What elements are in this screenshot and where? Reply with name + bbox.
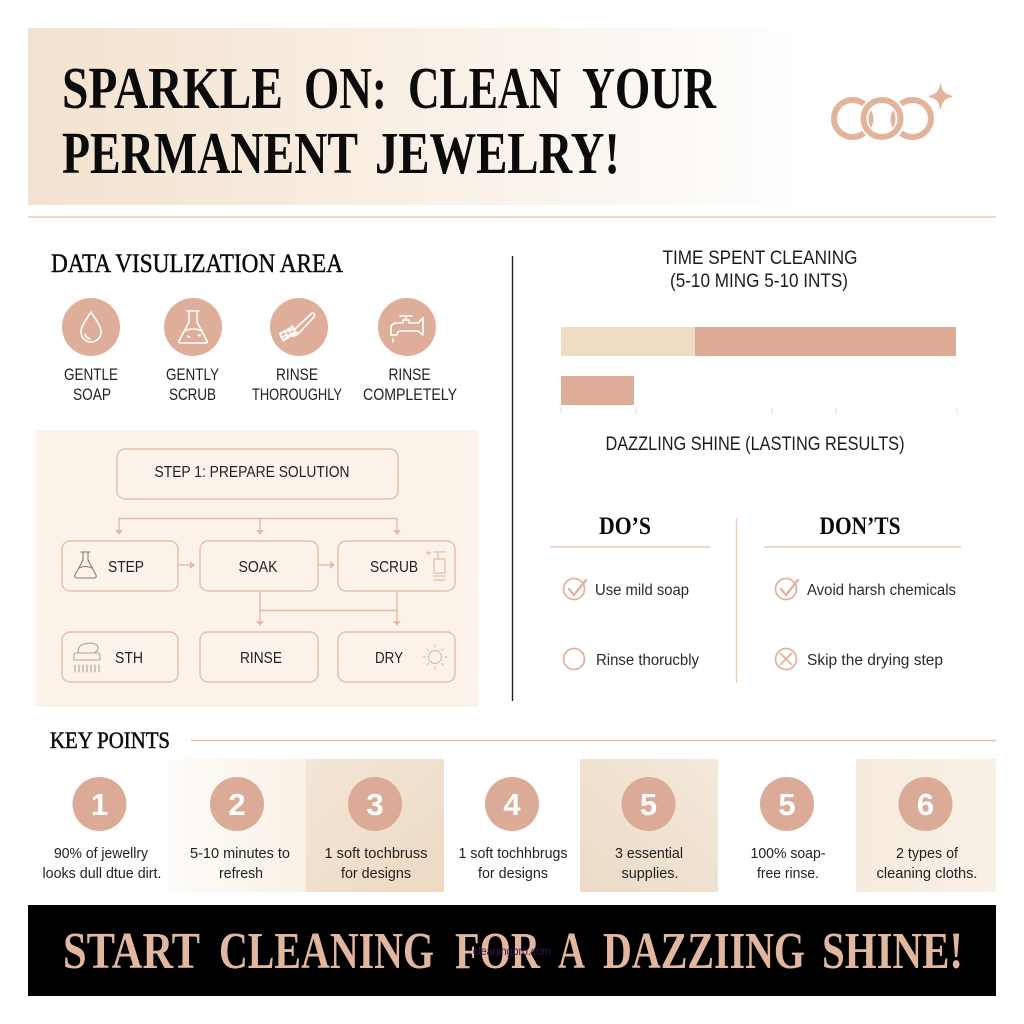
icon: linked rings with sparkle (834, 84, 952, 137)
call to action banner: FOR (455, 923, 541, 980)
box: sth (62, 632, 178, 682)
chart caption: DAZZLING SHINE (LASTING RESULTS) (606, 434, 904, 455)
connector: step 1 to row (115, 518, 401, 535)
key point 6 (750, 777, 826, 882)
key point 2: refresh (219, 865, 263, 882)
item: use mild soap (564, 578, 689, 600)
key point 7 (856, 759, 996, 892)
key point 6: 100% soap- (750, 845, 826, 862)
icon group: gently scrub (164, 298, 222, 404)
box: scrub (338, 541, 455, 591)
box: soak (200, 541, 318, 591)
title: ON: (304, 55, 387, 121)
icon group: rinse completely: COMPLETELY (363, 386, 457, 404)
item: avoid harsh chemicals (776, 578, 956, 600)
title: CLEAN (408, 55, 561, 121)
chart title (662, 248, 858, 292)
key point 3: 1 soft tochbruss (324, 845, 428, 862)
icon group: gentle soap: GENTLE (64, 366, 118, 384)
key point 5: 3 essential (615, 845, 683, 862)
key point 4: 1 soft tochhbrugs (458, 845, 568, 862)
title: PERMANENT (62, 120, 358, 186)
key point 2 (168, 759, 306, 892)
key point 1: looks dull dtue dirt. (42, 865, 162, 882)
title (62, 55, 717, 186)
header banner (28, 28, 996, 205)
box: dry (338, 632, 455, 682)
box: step (62, 541, 178, 591)
call to action banner: A (558, 923, 585, 980)
key point 4: 4 (503, 787, 521, 822)
box: step: STEP (108, 559, 144, 576)
icon group: gently scrub: SCRUB (169, 386, 216, 404)
connector: lower branch (256, 591, 401, 626)
icon group: gentle soap: SOAP (73, 386, 111, 404)
panel: do's (550, 513, 710, 670)
key point 2: 5-10 minutes to (190, 845, 290, 862)
item: rinse thoroughly: Rinse thorucbly (596, 652, 699, 669)
key point 7: cleaning cloths. (876, 865, 978, 882)
step 1 box: STEP 1: PREPARE SOLUTION (154, 464, 350, 481)
heading: data visualization area: DATA VISULIZATION AREA (51, 249, 343, 278)
heading: key points: KEY POINTS (50, 728, 170, 753)
chart title: (5-10 MING 5-10 INTS) (670, 271, 848, 292)
key point 3: for designs (341, 865, 411, 882)
arrow (319, 561, 335, 569)
call to action banner: DAZZIING (603, 923, 805, 980)
box: rinse (200, 632, 318, 682)
title: SPARKLE (62, 55, 283, 121)
panel: don'ts: DON’TS (820, 513, 900, 540)
key point 4: for designs (478, 865, 548, 882)
call to action banner (28, 905, 996, 996)
item: skip the drying step: Skip the drying step (807, 652, 943, 669)
icon group: rinse completely: RINSE (388, 366, 430, 384)
key point 5 (580, 759, 718, 892)
icon group: rinse thoroughly (252, 298, 342, 404)
icon group: rinse thoroughly: RINSE (276, 366, 318, 384)
panel: process flowchart (35, 430, 478, 707)
icon group: gentle soap (62, 298, 120, 404)
key point 1: 1 (91, 787, 108, 822)
item: rinse thoroughly (564, 648, 699, 670)
key point 6: 5 (778, 787, 796, 822)
title: JEWELRY! (375, 120, 620, 186)
key point 1 (42, 777, 162, 882)
box: scrub: SCRUB (370, 559, 418, 576)
key point 6: free rinse. (757, 865, 819, 882)
panel: do's: DO’S (599, 513, 651, 540)
item: avoid harsh chemicals: Avoid harsh chemicals (807, 582, 956, 599)
box: soak: SOAK (238, 559, 278, 576)
key point 4 (458, 777, 568, 882)
call to action banner: SHINE! (822, 923, 963, 980)
key point 7: 6 (917, 787, 934, 822)
key point 3 (306, 759, 444, 892)
arrow (179, 561, 195, 569)
bar chart (561, 327, 957, 414)
box: dry: DRY (375, 650, 403, 667)
icon group: rinse completely (363, 298, 457, 404)
item: use mild soap: Use mild soap (595, 582, 689, 599)
title: YOUR (582, 55, 717, 121)
box: rinse: RINSE (240, 650, 282, 667)
key point 5: supplies. (622, 865, 678, 882)
chart title: TIME SPENT CLEANING (662, 248, 858, 269)
icon group: rinse thoroughly: THOROUGHLY (252, 386, 342, 404)
call to action banner: cleaningbro.com (473, 944, 551, 958)
box: sth: STH (115, 650, 143, 667)
key point 3: 3 (366, 787, 384, 822)
icon group: gently scrub: GENTLY (166, 366, 219, 384)
call to action banner: START (63, 923, 200, 980)
key point 5: 5 (640, 787, 657, 822)
item: skip the drying step (776, 648, 943, 670)
key point 1: 90% of jewellry (54, 845, 148, 862)
step 1 box (117, 449, 398, 499)
call to action banner: CLEANING (219, 923, 434, 980)
key point 7: 2 types of (896, 845, 959, 862)
key point 2: 2 (228, 787, 246, 822)
panel: don'ts (764, 513, 961, 670)
